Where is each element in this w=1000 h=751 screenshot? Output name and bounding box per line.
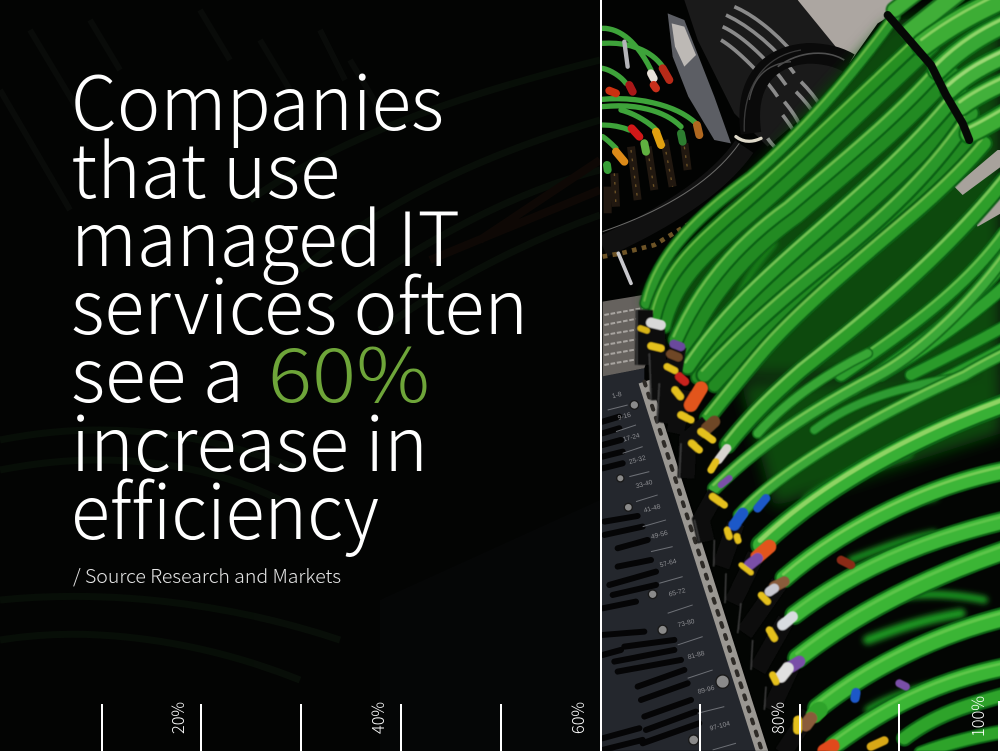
panel port labels: 9-16 [617, 412, 632, 422]
left fan cables [644, 14, 894, 303]
top-right bundle cables [894, 0, 916, 10]
panel port labels: 17-24 [622, 432, 641, 444]
panel port labels: 97-104 [709, 720, 731, 733]
headline statistic: managed IT [71, 179, 460, 288]
headline statistic: Companies [71, 43, 444, 152]
panel port labels: 41-48 [643, 503, 662, 515]
metal connector strip [644, 382, 763, 751]
headline statistic: that use [71, 111, 340, 220]
black cable bundle ties [888, 15, 969, 140]
panel port labels: 49-56 [650, 530, 669, 541]
panel port labels: 33-40 [635, 479, 654, 490]
source note: / Source Research and Markets [73, 562, 341, 589]
grey background behind cables [954, 150, 1000, 227]
panel: faint darkened photo background [0, 10, 600, 751]
panel port labels: 73-80 [677, 618, 696, 629]
panel port labels: 89-96 [697, 685, 716, 696]
grey wall [798, 0, 894, 63]
photo: green network cables [601, 0, 1000, 751]
panel screws [617, 401, 729, 745]
colour-banded cable boots [637, 310, 906, 751]
headline statistic: efficiency [71, 452, 379, 561]
black area right of strip [651, 375, 1000, 751]
tick labels: 20% [164, 702, 189, 734]
panel port labels: 65-72 [668, 587, 687, 599]
panel port labels: 25-32 [628, 455, 647, 466]
tick labels: 60% [564, 702, 589, 734]
tick labels: 80% [764, 702, 789, 734]
dark equipment column [668, 0, 849, 150]
tick labels [164, 696, 989, 737]
headline statistic: increase in [71, 384, 428, 493]
thick black horizontal cable with bronze connectors [603, 140, 744, 257]
divider line between text and photo [600, 0, 602, 751]
tick marks [101, 701, 1000, 751]
blurred dark-green mass behind cables [644, 0, 1000, 507]
green cable fan [644, 0, 1000, 515]
warning label plate [602, 295, 648, 376]
panel port labels: 81-88 [687, 650, 706, 661]
panel port labels: 1-8 [611, 391, 623, 400]
tick labels: 40% [364, 702, 389, 734]
equipment panel [601, 368, 764, 751]
panel port labels [611, 391, 731, 733]
cable ties [618, 42, 761, 283]
headline statistic: 60% [268, 315, 430, 424]
thin green cables with coloured connectors [603, 28, 699, 170]
blurred background green [734, 243, 984, 710]
tick labels: 100% [964, 696, 989, 737]
right side cables, upper [911, 327, 1000, 388]
headline statistic: see a [71, 315, 244, 424]
panel port labels: 57-64 [659, 558, 678, 569]
large foreground cables [760, 400, 1000, 751]
headline statistic [71, 43, 528, 561]
headline statistic: services often [71, 247, 528, 356]
black coiled cable [744, 50, 849, 133]
